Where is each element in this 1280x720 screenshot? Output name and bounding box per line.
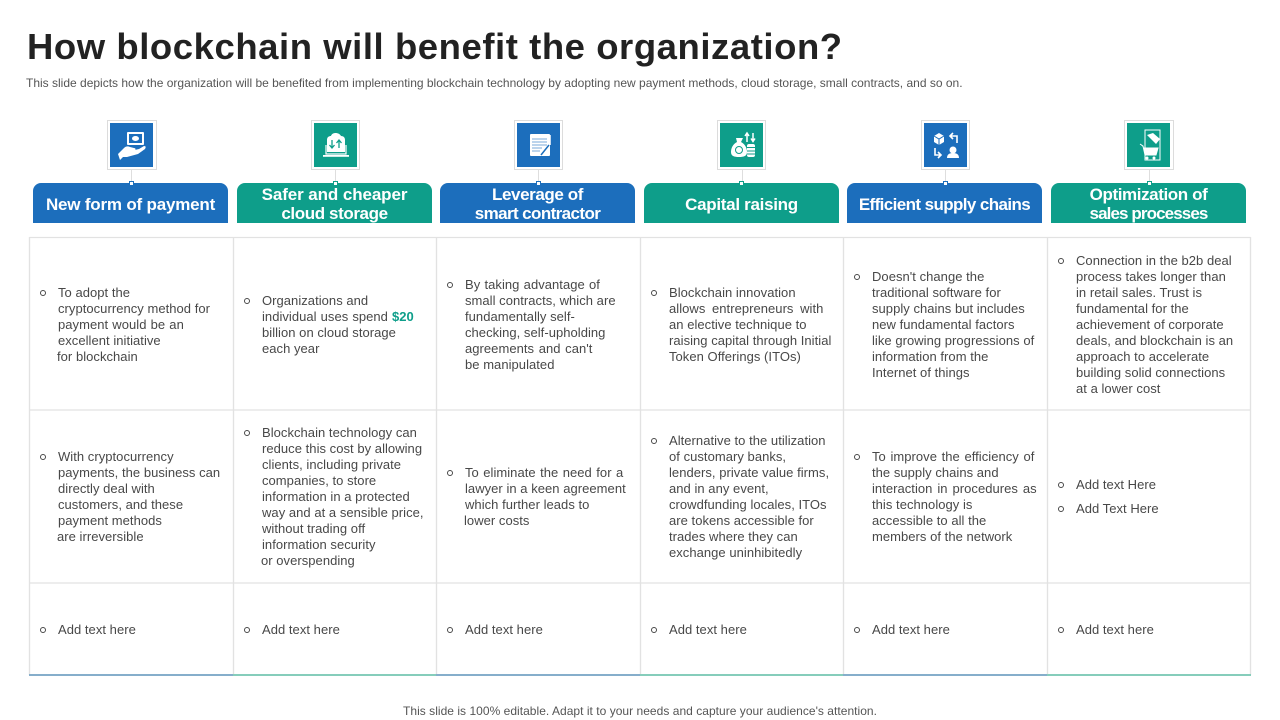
text: cloud row 2	[244, 425, 424, 568]
text: contracts row 2: which further leads to	[465, 497, 589, 512]
text: cloud row 2: Blockchain technology can	[262, 425, 417, 440]
text: contracts row 1: checking, self-upholding	[465, 325, 605, 340]
subtitle: This slide depicts how the organization will be benefited from implementing blockchain technology by adopting new payment methods, cloud storage, small contracts, and so on.	[26, 76, 963, 90]
text: cloud row 2: reduce this cost by allowing	[262, 441, 422, 456]
text: sales row 2	[1058, 477, 1159, 516]
text: supply row 1: Doesn't change the	[872, 269, 984, 284]
text: sales row 1: building solid connections	[1076, 365, 1225, 380]
icon: money bag and coins	[717, 120, 766, 170]
text: sales row 1: deals, and blockchain is an	[1076, 333, 1233, 348]
text: supply row 1: new fundamental factors	[872, 317, 1015, 332]
title: How blockchain will benefit the organization?	[27, 26, 843, 67]
icon: shopping cart with price tag	[1124, 120, 1174, 170]
text: supply row 1: Internet of things	[872, 365, 970, 380]
text: sales row 1: approach to accelerate	[1076, 349, 1209, 364]
text: supply row 2: members of the network	[872, 529, 1012, 544]
text: supply row 1: traditional software for	[872, 285, 1001, 300]
text: contracts row 1: agreements and can't	[465, 341, 592, 356]
heading: Capital raising: Capital raising	[685, 195, 798, 214]
heading: Optimization of sales processes: Optimization of	[1090, 185, 1207, 204]
text: capital row 2: are tokens accessible for	[669, 513, 814, 528]
text: capital row 2: lenders, private value firms,	[669, 465, 829, 480]
text: supply row 2: accessible to all the	[872, 513, 986, 528]
icon: contract document	[514, 120, 563, 170]
text: supply row 1	[854, 269, 1034, 380]
icon: cloud storage laptop	[311, 120, 360, 170]
text: supply row 2: interaction in procedures as	[872, 481, 1037, 496]
text: row 3 column 5: Add text here	[872, 622, 950, 637]
text: capital row 2: and in any event,	[669, 481, 769, 496]
text: cloud row 2: or overspending	[261, 553, 355, 568]
text: sales row 2: Add text Here	[1076, 477, 1156, 492]
text: payment row 2: customers, and these	[58, 497, 183, 512]
heading: Efficient supply chains	[847, 183, 1042, 223]
text: payment row 1: excellent initiative	[58, 333, 161, 348]
text: payment row 1: To adopt the	[58, 285, 130, 300]
heading: New form of payment: New form of payment	[46, 195, 215, 214]
text: payment row 1: for blockchain	[57, 349, 138, 364]
text: payment row 2: directly deal with	[58, 481, 155, 496]
text: row 3 column 4: Add text here	[669, 622, 747, 637]
heading: Safer and cheaper cloud storage: cloud storage	[281, 204, 388, 223]
heading: Optimization of sales processes: sales processes	[1090, 204, 1207, 223]
text: sales row 1: process takes longer than	[1076, 269, 1226, 284]
text: cloud row 1: individual uses spend $20	[262, 309, 414, 324]
text: row 3 column 3: Add text here	[465, 622, 543, 637]
text: capital row 2	[651, 433, 829, 560]
text: contracts row 2: lawyer in a keen agreement	[465, 481, 626, 496]
text: payment row 1: cryptocurrency method for	[58, 301, 210, 316]
text: capital row 1: allows entrepreneurs with	[669, 301, 823, 316]
text: capital row 1: Token Offerings (ITOs)	[669, 349, 801, 364]
text: cloud row 1: Organizations and	[262, 293, 368, 308]
text: payment row 2: payments, the business can	[58, 465, 220, 480]
text: cloud row 1	[244, 293, 414, 356]
footer note: This slide is 100% editable. Adapt it to your needs and capture your audience's attention.	[403, 704, 877, 718]
text: contracts row 2: To eliminate the need for a	[465, 465, 623, 480]
heading: Safer and cheaper cloud storage	[237, 183, 432, 223]
text: contracts row 2: lower costs	[464, 513, 529, 528]
text: row 3 column 1: Add text here	[58, 622, 136, 637]
text: capital row 1	[651, 285, 831, 364]
text: capital row 2: of customary banks,	[669, 449, 786, 464]
heading: Leverage of smart contractor: Leverage of	[492, 185, 583, 204]
text: payment row 1: payment would be an	[58, 317, 184, 332]
text: supply row 1: like growing progressions of	[872, 333, 1034, 348]
text: capital row 2: crowdfunding locales, ITOs	[669, 497, 827, 512]
text: cloud row 2: way and at a sensible price,	[262, 505, 424, 520]
text: payment row 2: With cryptocurrency	[58, 449, 174, 464]
text: supply row 2	[854, 449, 1037, 544]
heading: Safer and cheaper cloud storage: Safer and cheaper	[262, 185, 407, 204]
text: capital row 2: Alternative to the utilization	[669, 433, 826, 448]
text: supply row 1: information from the	[872, 349, 988, 364]
text: cloud row 2: without trading off	[262, 521, 365, 536]
heading: Leverage of smart contractor: smart contractor	[475, 204, 600, 223]
text: cloud row 1: each year	[262, 341, 319, 356]
text: contracts row 1: be manipulated	[465, 357, 554, 372]
text: row 3 column 2: Add text here	[262, 622, 340, 637]
text: contracts row 1: small contracts, which are	[465, 293, 616, 308]
text: cloud row 1: billion on cloud storage	[262, 325, 396, 340]
text: capital row 1: raising capital through Initial	[669, 333, 831, 348]
text: contracts row 1: fundamentally self-	[465, 309, 575, 324]
text: payment row 2	[40, 449, 220, 544]
heading: New form of payment	[33, 183, 228, 223]
text: supply row 1: supply chains but includes	[872, 301, 1025, 316]
text: supply row 2: To improve the efficiency of	[872, 449, 1034, 464]
icon: hand holding banknote	[107, 120, 157, 170]
text: sales row 1: at a lower cost	[1076, 381, 1160, 396]
text: cloud row 2: information security	[262, 537, 376, 552]
text: payment row 2: are irreversible	[57, 529, 144, 544]
heading: Capital raising	[644, 183, 839, 223]
text: sales row 1: fundamental for the	[1076, 301, 1189, 316]
text: contracts row 1	[447, 277, 616, 372]
heading: Optimization of sales processes	[1051, 183, 1246, 223]
text: payment row 2: payment methods	[58, 513, 162, 528]
text: cloud row 2: information in a protected	[262, 489, 410, 504]
text: sales row 1: achievement of corporate	[1076, 317, 1224, 332]
text: capital row 2: exchange uninhibitedly	[669, 545, 802, 560]
text: sales row 1: Connection in the b2b deal	[1076, 253, 1232, 268]
icon: supply chain	[921, 120, 970, 170]
text: contracts row 1: By taking advantage of	[465, 277, 600, 292]
text: cloud row 2: companies, to store	[262, 473, 376, 488]
text: cloud row 2: clients, including private	[262, 457, 401, 472]
text: capital row 2: trades where they can	[669, 529, 798, 544]
text: sales row 1	[1058, 253, 1233, 396]
text: supply row 2: this technology is	[872, 497, 972, 512]
text: capital row 1: Blockchain innovation	[669, 285, 796, 300]
text: payment row 1	[40, 285, 210, 364]
text: sales row 2: Add Text Here	[1076, 501, 1159, 516]
text: contracts row 2	[447, 465, 626, 528]
text: supply row 2: the supply chains and	[872, 465, 999, 480]
heading: Leverage of smart contractor	[440, 183, 635, 223]
heading: Efficient supply chains: Efficient supply chains	[859, 195, 1030, 214]
text: row 3 column 6: Add text here	[1076, 622, 1154, 637]
text: capital row 1: an elective technique to	[669, 317, 807, 332]
text: sales row 1: in retail sales. Trust is	[1076, 285, 1202, 300]
